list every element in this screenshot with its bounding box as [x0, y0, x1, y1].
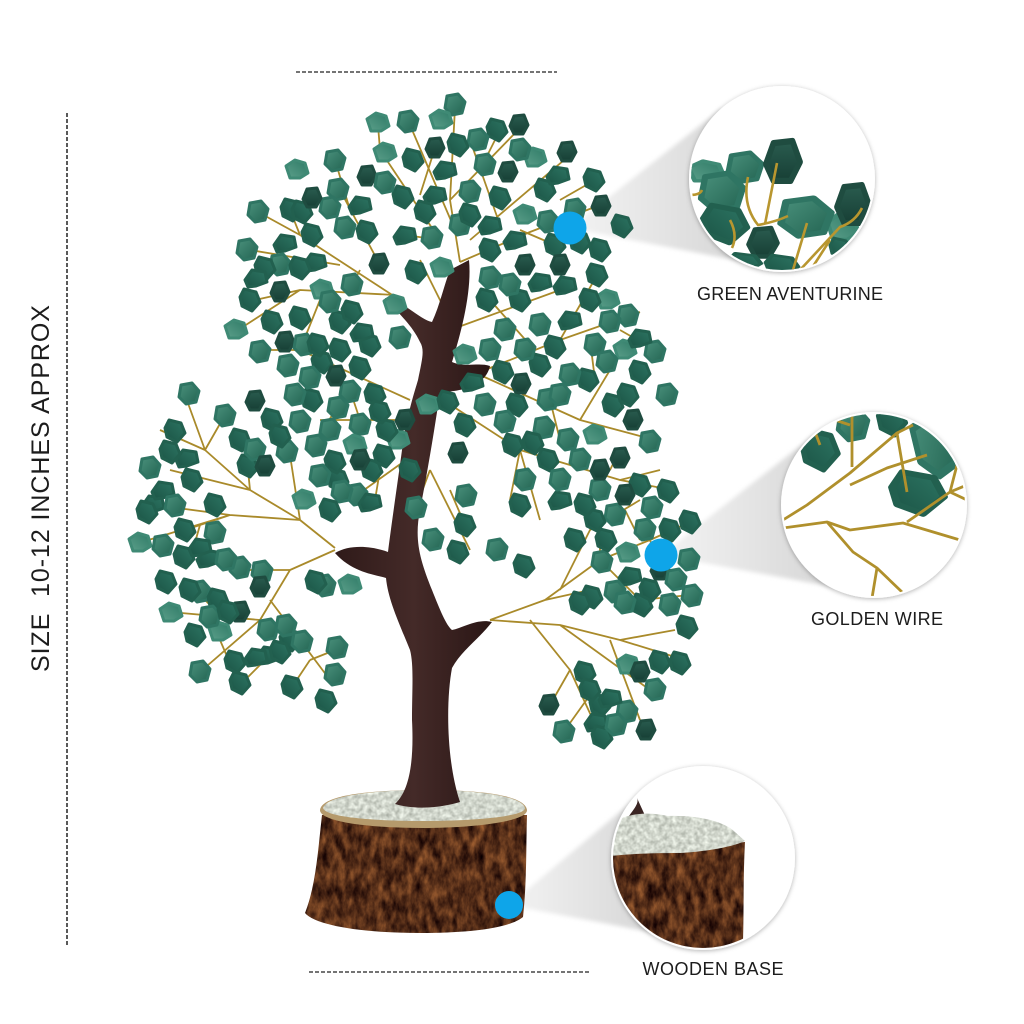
gemstone canopy — [129, 94, 702, 748]
callout circle: green aventurine — [688, 86, 875, 275]
callout circle: golden wire — [781, 405, 967, 598]
marker: base — [495, 891, 523, 919]
wooden base — [305, 790, 527, 933]
dimension line: bottom width — [309, 971, 589, 973]
marker: wire — [644, 538, 678, 572]
callout label: green aventurine: GREEN AVENTURINE — [697, 284, 883, 304]
callout label: wooden base: WOODEN BASE — [642, 959, 784, 979]
callout cones — [509, 108, 834, 933]
dimension line: height — [66, 113, 68, 946]
marker: stones — [554, 212, 586, 244]
callout circle: wooden base — [610, 766, 795, 952]
dimension line: top width — [296, 71, 557, 73]
size label: SIZE 10-12 INCHES APPROX — [27, 305, 55, 672]
callout label: golden wire: GOLDEN WIRE — [811, 609, 943, 629]
tree trunk — [335, 260, 492, 808]
gold wires — [142, 108, 690, 735]
